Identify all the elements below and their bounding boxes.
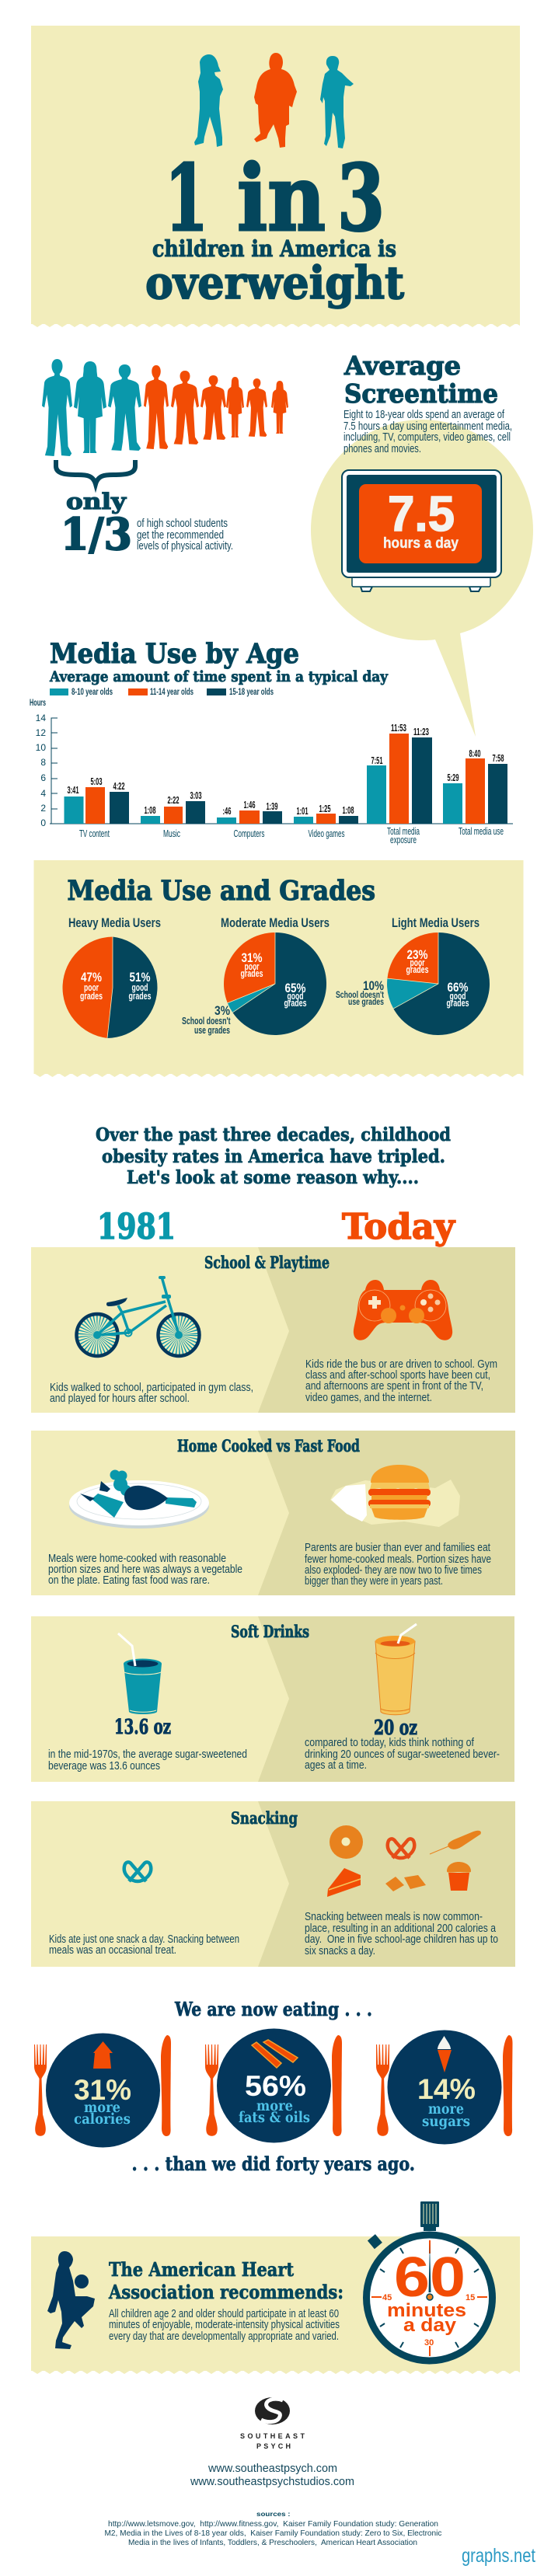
value labels: 11:23 xyxy=(413,727,429,737)
text: today snacking xyxy=(305,1910,498,1957)
text: today drinks: compared to today, kids think nothing of xyxy=(305,1736,475,1749)
stat: only 1/3: only xyxy=(66,489,127,514)
axis: 14 xyxy=(36,713,46,723)
plate: sugars: more xyxy=(428,2100,464,2118)
pie chart: moderate media users: 65% xyxy=(284,981,306,995)
speech bubble xyxy=(311,420,533,737)
value labels: 5:03 xyxy=(90,776,103,787)
pie chart: moderate media users: poor xyxy=(244,961,260,972)
pie chart: heavy media users: grades xyxy=(129,991,152,1002)
text: today snacking: place, resulting in an additional 200 calories a xyxy=(305,1922,497,1935)
plate: fats and oils: more xyxy=(256,2097,293,2114)
text: today food: bigger than they were in years past. xyxy=(305,1574,443,1588)
icon: stopwatch: 60 xyxy=(394,2247,466,2309)
text: today drinks xyxy=(305,1736,500,1772)
text: screentime description: phones and movies. xyxy=(343,442,421,455)
text: today snacking: Snacking between meals is now common- xyxy=(305,1910,483,1923)
axis: 0 xyxy=(40,817,46,828)
icon: stopwatch: 45 xyxy=(382,2293,392,2302)
text: recommendation: All children age 2 and older should participate in at least 60 xyxy=(109,2307,339,2320)
pie chart: light media users: good xyxy=(449,991,466,1002)
text: obesity intro: Over the past three decades, childhood xyxy=(96,1124,451,1145)
icon: corn dog xyxy=(430,1831,480,1854)
text: sources: http://www.letsmove.gov, http://www.fitness.gov, Kaiser Family Foundation study: Generation xyxy=(108,2519,438,2529)
text: today food: fewer home-cooked meals. Portion sizes have xyxy=(305,1553,491,1566)
axis: 4 xyxy=(40,788,46,799)
legend: 11-14 year olds xyxy=(150,686,194,697)
text: websites: www.southeastpsychstudios.com xyxy=(190,2475,354,2488)
pie chart: moderate media users: good xyxy=(288,991,303,1002)
legend: 8-10 year olds xyxy=(71,686,113,697)
text: 1970s drinks: beverage was 13.6 ounces xyxy=(48,1759,160,1773)
heading: Media Use and Grades xyxy=(67,875,375,907)
text: physical activity note: levels of physical activity. xyxy=(137,539,233,552)
plate: fats and oils xyxy=(205,2028,342,2143)
bars: teal 8-10 xyxy=(64,765,462,824)
panel: soft drinks xyxy=(31,1616,514,1782)
stat: only 1/3 xyxy=(61,489,132,560)
category labels: Music xyxy=(163,828,180,839)
icon: stopwatch xyxy=(367,2201,493,2361)
text: today food: Parents are busier than ever and families eat xyxy=(305,1541,491,1554)
value labels: 3:03 xyxy=(190,790,202,801)
category labels: TV content xyxy=(79,828,110,839)
value labels: 5:29 xyxy=(448,772,459,783)
category labels: Total media xyxy=(387,826,420,837)
pie chart: moderate media users: 3% xyxy=(214,1003,230,1018)
plate: calories xyxy=(34,2033,171,2148)
heading: Soft Drinks xyxy=(231,1622,309,1641)
legend: 15-18 year olds xyxy=(229,686,274,697)
value labels: 1:01 xyxy=(297,806,309,817)
pie chart: heavy media users: poor xyxy=(84,982,99,993)
text: 1970s drinks: in the mid-1970s, the average sugar-sweetened xyxy=(48,1748,247,1761)
icon: large cup xyxy=(375,1624,417,1715)
logo: Southeast Psych: PSYCH xyxy=(256,2442,291,2450)
plate: sugars xyxy=(376,2030,513,2145)
panel: home cooked vs fast food xyxy=(31,1431,515,1595)
pie chart: moderate media users: use grades xyxy=(194,1025,230,1036)
icon: game controller xyxy=(354,1280,452,1340)
panel: average screentime xyxy=(311,350,533,737)
pie chart: light media users: 10% xyxy=(363,978,384,993)
category labels: Total media use xyxy=(459,826,504,837)
axis: 8 xyxy=(40,757,46,768)
icon: hamburger xyxy=(330,1465,460,1527)
category labels xyxy=(79,826,504,845)
text: physical activity note: get the recommended xyxy=(137,528,224,542)
pie chart: heavy media users xyxy=(63,915,161,1038)
heading: School & Playtime xyxy=(204,1253,330,1272)
text: screentime description xyxy=(343,408,512,455)
text: today school: class and after-school sports have been cut, xyxy=(305,1368,490,1382)
heading xyxy=(108,2258,343,2303)
text: today drinks: drinking 20 ounces of sugar-sweetened bever- xyxy=(305,1748,500,1761)
text: sources: sources : xyxy=(256,2510,291,2518)
value labels: 7:58 xyxy=(493,753,504,764)
title: children in America is xyxy=(152,235,396,262)
axis xyxy=(30,697,513,828)
text: 1981 snacking: meals was an occasional treat. xyxy=(49,1943,176,1957)
plate: calories: calories xyxy=(74,2111,131,2128)
icon: stopwatch: a day xyxy=(403,2315,457,2336)
text: sources: M2, Media in the Lives of 8-18 year olds, Kaiser Family Foundation study: Zero to Six, Electronic xyxy=(104,2529,441,2538)
category labels: Video games xyxy=(308,828,345,839)
axis: 2 xyxy=(40,803,46,814)
pie chart: light media users: grades xyxy=(446,998,469,1009)
bars: orange 11-14 xyxy=(85,734,485,824)
axis: 12 xyxy=(36,727,46,738)
pie chart: heavy media users: grades xyxy=(80,991,103,1002)
text: sources: Media in the lives of Infants, Toddlers, & Preschoolers, American Heart Association xyxy=(128,2538,417,2547)
text: today snacking: six snacks a day. xyxy=(305,1944,375,1957)
text: today school: video games, and the internet. xyxy=(305,1391,432,1404)
text: 1981 snacking: Kids ate just one snack a day. Snacking between xyxy=(49,1933,239,1946)
heading: Snacking xyxy=(231,1808,298,1828)
title: overweight xyxy=(145,256,404,309)
bars: navy 15-18 xyxy=(110,737,507,824)
pie chart: light media users: 66% xyxy=(448,980,468,995)
value labels: 4:22 xyxy=(113,781,125,792)
text: today school: Kids ride the bus or are driven to school. Gym xyxy=(305,1358,497,1371)
text: 1981 school xyxy=(50,1381,253,1405)
text: today food xyxy=(305,1541,491,1588)
icon: television: hours a day xyxy=(383,535,459,552)
value labels: 1:08 xyxy=(342,805,354,816)
column heading: Today: Today xyxy=(342,1206,456,1247)
bar chart xyxy=(30,697,513,845)
pie chart: moderate media users: Moderate Media Users xyxy=(221,915,330,930)
plate: fats and oils: fats & oils xyxy=(239,2109,310,2126)
text: today drinks: ages at a time. xyxy=(305,1759,367,1772)
pie chart: light media users: use grades xyxy=(348,996,384,1007)
pie chart: heavy media users: good xyxy=(132,982,148,993)
pie chart: light media users: grades xyxy=(406,964,429,975)
text: 1981 food xyxy=(48,1552,242,1587)
plate: sugars: sugars xyxy=(422,2113,470,2130)
panel: snacking xyxy=(31,1801,515,1967)
heading: Association recommends: xyxy=(108,2281,343,2303)
heading: forty years ago: . . . than we did forty years ago. xyxy=(132,2152,415,2175)
axis: 10 xyxy=(36,742,46,753)
title xyxy=(145,145,404,309)
legend xyxy=(50,686,274,697)
pie chart: heavy media users: 47% xyxy=(81,970,102,985)
text: today school: and afternoons are spent in front of the TV, xyxy=(305,1379,483,1393)
text: physical activity note: of high school students xyxy=(137,517,228,530)
logo: Southeast Psych: SOUTHEAST xyxy=(240,2432,305,2440)
icon: television: 7.5 xyxy=(388,486,455,542)
icon: child with ball xyxy=(47,2251,95,2349)
icon: pie slice xyxy=(327,1868,361,1897)
text: 1981 food: portion sizes and here was always a vegetable xyxy=(48,1563,242,1576)
icon: three children silhouettes xyxy=(194,53,354,148)
heading xyxy=(343,350,498,409)
column heading: 1981: 1981 xyxy=(97,1206,176,1247)
value labels: 3:41 xyxy=(67,785,79,796)
icon: row of students xyxy=(42,359,288,456)
icon: pretzel orange xyxy=(388,1839,414,1858)
heading: Media Use by Age xyxy=(50,638,299,670)
text: 1981 snacking xyxy=(49,1933,239,1957)
icon: stopwatch: 15 xyxy=(466,2293,475,2302)
value labels: 1:25 xyxy=(319,803,331,814)
panel: hero xyxy=(31,26,520,327)
value labels: 1:46 xyxy=(244,800,256,810)
value labels: 1:08 xyxy=(145,805,156,816)
pie chart: light media users: poor xyxy=(410,957,425,968)
value labels: :46 xyxy=(222,806,232,817)
plate: calories: 31% xyxy=(74,2074,131,2106)
heading: Average xyxy=(343,350,461,381)
text: 13.6 oz: 13.6 oz xyxy=(114,1716,171,1739)
title: 3 xyxy=(337,145,385,252)
text: sources xyxy=(104,2510,441,2547)
text: recommendation: every day that are developmentally appropriate and varied. xyxy=(109,2330,339,2343)
text: recommendation xyxy=(109,2307,340,2343)
pie chart: light media users: School doesn't xyxy=(336,989,384,1000)
icon: donut xyxy=(330,1825,363,1859)
category labels: Computers xyxy=(233,828,264,839)
icon: stopwatch: minutes xyxy=(387,2300,466,2321)
pie chart: moderate media users: 31% xyxy=(241,950,263,965)
panel: media use by age xyxy=(30,638,513,845)
text: websites xyxy=(190,2462,354,2488)
text: websites: www.southeastpsych.com xyxy=(207,2462,337,2475)
pie chart: moderate media users: grades xyxy=(284,998,307,1009)
heading: Screentime xyxy=(344,378,498,409)
value labels: 11:53 xyxy=(391,723,406,734)
icon: muffin xyxy=(447,1862,471,1891)
icon: pretzel teal xyxy=(124,1862,151,1881)
value labels: 8:40 xyxy=(469,748,481,759)
value labels: 2:22 xyxy=(168,795,180,806)
pie chart: moderate media users: grades xyxy=(241,968,263,979)
text: obesity intro: Let's look at some reason why.... xyxy=(127,1167,419,1188)
icon: bicycle xyxy=(76,1276,199,1356)
title: 1 xyxy=(165,145,208,252)
heading: we are now eating: We are now eating . . . xyxy=(174,1998,372,2020)
plate: fats and oils: 56% xyxy=(245,2070,306,2102)
text: obesity intro xyxy=(96,1124,451,1188)
pie chart: light media users: Light Media Users xyxy=(392,915,479,930)
icon: stopwatch: 30 xyxy=(424,2338,434,2348)
text: physical activity note xyxy=(137,517,233,552)
value labels: 1:39 xyxy=(266,801,278,812)
heading: Home Cooked vs Fast Food xyxy=(177,1436,360,1455)
panel: physical activity xyxy=(42,359,288,560)
text: 1981 school: and played for hours after school. xyxy=(50,1392,190,1405)
pie chart: moderate media users: School doesn't xyxy=(182,1016,231,1027)
text: obesity intro: obesity rates in America have tripled. xyxy=(102,1146,445,1167)
heading: The American Heart xyxy=(109,2258,294,2281)
text: today snacking: day. One in five school-age children has up to xyxy=(305,1933,498,1946)
icon: small cup xyxy=(118,1633,162,1714)
stat: only 1/3: 1/3 xyxy=(61,509,132,560)
icon: plate with chicken and vegetables xyxy=(69,1470,209,1529)
heading xyxy=(49,638,389,685)
text: recommendation: minutes of enjoyable, moderate-intensity physical activities xyxy=(109,2318,340,2331)
brace xyxy=(56,460,135,484)
axis: Hours xyxy=(30,697,46,708)
text: today school xyxy=(305,1358,497,1404)
text: today food: also exploded- they are now two to five times xyxy=(305,1563,482,1577)
panel: american heart association xyxy=(31,2201,520,2374)
pie chart: moderate media users xyxy=(182,915,330,1036)
value labels xyxy=(67,723,504,817)
text: 1970s drinks xyxy=(48,1748,247,1773)
text: 1981 food: on the plate. Eating fast food was rare. xyxy=(48,1574,210,1587)
text: 1981 school: Kids walked to school, participated in gym class, xyxy=(50,1381,253,1394)
title: in xyxy=(237,145,326,252)
plate: calories: more xyxy=(84,2099,120,2116)
axis: 6 xyxy=(40,772,46,783)
pie chart: heavy media users: Heavy Media Users xyxy=(68,915,161,930)
pie chart: light media users: 23% xyxy=(407,947,427,962)
plate: sugars: 14% xyxy=(417,2073,476,2105)
category labels: exposure xyxy=(390,835,417,845)
value labels: 7:51 xyxy=(371,755,383,766)
heading: Average amount of time spent in a typical day xyxy=(49,668,389,685)
logo: Southeast Psych xyxy=(240,2397,305,2450)
pie chart: heavy media users: 51% xyxy=(129,970,151,985)
panel: media use and grades xyxy=(34,860,524,1077)
text: 1981 food: Meals were home-cooked with reasonable xyxy=(48,1552,226,1565)
text: 20 oz: 20 oz xyxy=(374,1717,417,1740)
panel: school and playtime xyxy=(31,1247,515,1413)
icon: television xyxy=(342,470,501,591)
pie chart: light media users xyxy=(336,915,490,1035)
icon: crackers xyxy=(385,1875,426,1891)
